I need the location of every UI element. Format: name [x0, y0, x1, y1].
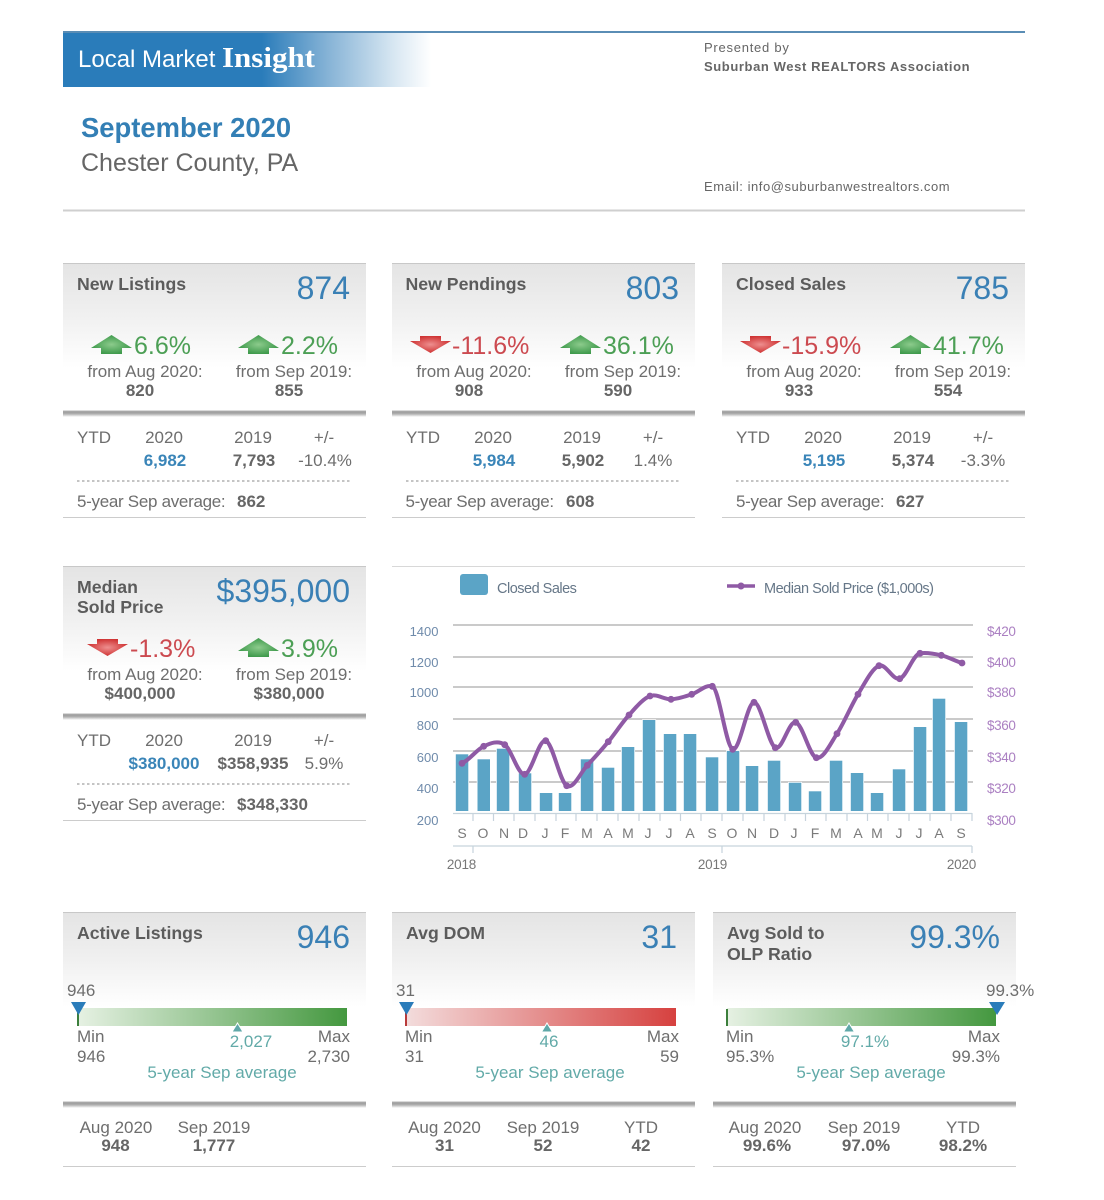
month labels: M	[581, 825, 593, 841]
panel: New Listings: from Aug 2020:	[87, 362, 203, 381]
panel: New Pendings: 803	[626, 270, 679, 306]
year labels: 2018	[447, 857, 476, 872]
panel: Closed Sales: 2020	[804, 428, 842, 447]
month labels: M	[830, 825, 842, 841]
panel: Active Listings	[63, 912, 366, 1167]
panel: Closed Sales: 5,374	[892, 451, 935, 470]
right axis labels: $420	[987, 624, 1015, 639]
panel: New Pendings: from Sep 2019:	[565, 362, 681, 381]
panel: Avg Sold to OLP Ratio: Avg Sold to	[727, 923, 825, 943]
month labels: A	[685, 825, 695, 841]
left axis labels	[410, 624, 438, 828]
panel: Closed Sales: Closed Sales	[736, 274, 846, 294]
panel: Avg DOM: 5-year Sep average	[475, 1063, 625, 1082]
panel: Active Listings: Max	[318, 1027, 350, 1046]
panel: Avg DOM: Avg DOM	[406, 923, 485, 943]
legend: median sold price: Median Sold Price ($1,000s)	[764, 581, 933, 597]
panel: Avg DOM: Max	[647, 1027, 679, 1046]
panel: Avg Sold to OLP Ratio: 98.2%	[939, 1136, 987, 1155]
month labels: J	[542, 825, 548, 841]
report title	[81, 112, 299, 177]
panel: Avg Sold to OLP Ratio: 99.3%	[909, 919, 1000, 955]
panel: Median Sold Price: 2020	[145, 731, 183, 750]
panel: Closed Sales: 785	[956, 270, 1009, 306]
panel: Avg DOM: 42	[632, 1136, 650, 1155]
panel: New Pendings: New Pendings	[406, 274, 527, 294]
panel: Avg DOM: 31	[435, 1136, 454, 1155]
panel: Avg DOM: 31	[641, 919, 677, 955]
panel: Avg Sold to OLP Ratio: 5-year Sep average	[796, 1063, 946, 1082]
month labels: N	[747, 825, 757, 841]
month labels: J	[916, 825, 922, 841]
header banner: Insight	[222, 43, 316, 74]
month labels: A	[934, 825, 944, 841]
panel: New Pendings	[392, 263, 695, 518]
left axis labels: 1200	[410, 655, 438, 670]
panel: Closed Sales: -15.9%	[782, 332, 861, 360]
panel: Avg DOM: Aug 2020	[408, 1118, 481, 1137]
panel: New Listings: YTD	[77, 428, 111, 447]
month labels: S	[956, 825, 966, 841]
panel: Median Sold Price: 2019	[234, 731, 272, 750]
presenter info	[704, 40, 970, 194]
right axis labels: $360	[987, 718, 1015, 733]
panel: Closed Sales: 933	[785, 381, 813, 400]
panel: Active Listings: 946	[67, 981, 95, 1000]
panel: New Listings: 6,982	[144, 451, 186, 470]
panel: Avg DOM: Sep 2019	[507, 1118, 579, 1137]
panel: Closed Sales: from Sep 2019:	[895, 362, 1011, 381]
panel: Avg Sold to OLP Ratio: YTD	[946, 1118, 980, 1137]
presenter info: Suburban West REALTORS Association	[704, 59, 970, 74]
median price line	[459, 650, 965, 789]
panel: Active Listings: 2,730	[307, 1047, 350, 1066]
panel: New Pendings: 5,984	[473, 451, 516, 470]
month labels: F	[811, 825, 819, 841]
panel: Active Listings: 2,027	[230, 1032, 272, 1051]
header banner	[63, 31, 1025, 87]
panel: Avg DOM	[392, 912, 695, 1167]
month labels: J	[790, 825, 798, 841]
panel: Median Sold Price: 3.9%	[281, 635, 338, 663]
year labels: 2019	[698, 857, 727, 872]
panel: Active Listings: 946	[77, 1047, 105, 1066]
right axis labels: $320	[987, 781, 1015, 796]
month labels: J	[896, 825, 902, 841]
panel: Avg DOM: 59	[660, 1047, 679, 1066]
panel: New Pendings: +/-	[643, 428, 663, 447]
panel: New Listings: 5-year Sep average:	[77, 492, 225, 511]
presenter info: Presented by	[704, 40, 790, 55]
panel: Closed Sales: YTD	[736, 428, 770, 447]
month labels: D	[518, 825, 528, 841]
panel: New Listings: 6.6%	[134, 332, 191, 360]
panel: Avg Sold to OLP Ratio: 97.1%	[841, 1032, 889, 1051]
panel: Median Sold Price: from Sep 2019:	[236, 665, 352, 684]
panel: New Pendings: 5,902	[562, 451, 604, 470]
panel: New Listings: 820	[126, 381, 154, 400]
month labels: A	[603, 825, 613, 841]
panel: Closed Sales: 5,195	[803, 451, 845, 470]
month labels: J	[644, 825, 652, 841]
right axis labels: $400	[987, 655, 1015, 670]
left axis labels: 800	[417, 718, 438, 733]
report title: Chester County, PA	[81, 149, 299, 177]
panel: New Listings: 2020	[145, 428, 183, 447]
year labels	[447, 857, 976, 872]
month labels: S	[457, 825, 467, 841]
panel: New Pendings: 36.1%	[603, 332, 674, 360]
panel: New Listings: 862	[237, 492, 265, 511]
panel: Closed Sales: 2019	[893, 428, 931, 447]
left axis labels: 1400	[410, 624, 438, 639]
panel: New Pendings: 5-year Sep average:	[406, 492, 554, 511]
panel: Closed Sales: 41.7%	[933, 332, 1004, 360]
panel: New Pendings: 908	[455, 381, 483, 400]
panel: Active Listings: Sep 2019	[178, 1118, 250, 1137]
panel: Closed Sales	[722, 263, 1025, 518]
right axis labels: $340	[987, 750, 1015, 765]
panel: Median Sold Price: $358,935	[218, 754, 288, 773]
panel: New Listings: New Listings	[77, 274, 186, 294]
panel: Active Listings: Active Listings	[77, 923, 203, 943]
panel: Median Sold Price: $380,000	[254, 684, 324, 703]
panel: Closed Sales: from Aug 2020:	[746, 362, 862, 381]
range bar	[71, 1002, 347, 1032]
panel: Closed Sales: -3.3%	[961, 451, 1005, 470]
month labels: A	[853, 825, 863, 841]
panel: Avg DOM: 31	[396, 981, 415, 1000]
panel: New Pendings: -11.6%	[452, 332, 529, 360]
panel: combo chart closed sales and median sold price	[392, 566, 1025, 872]
panel: Avg Sold to OLP Ratio: Aug 2020	[729, 1118, 801, 1137]
panel: Median Sold Price: $400,000	[105, 684, 175, 703]
header banner: Local Market	[78, 46, 216, 73]
panel: New Listings: -10.4%	[298, 451, 352, 470]
panel: Avg Sold to OLP Ratio: 95.3%	[726, 1047, 774, 1066]
closed sales bars	[456, 699, 967, 811]
left axis labels: 400	[417, 781, 438, 796]
month labels: O	[727, 825, 738, 841]
right axis labels: $300	[987, 813, 1015, 828]
month labels: O	[478, 825, 489, 841]
panel: Median Sold Price: +/-	[314, 731, 334, 750]
month labels: M	[871, 825, 883, 841]
panel: Closed Sales: 554	[934, 381, 963, 400]
panel: New Listings: 7,793	[233, 451, 275, 470]
panel: Closed Sales: +/-	[973, 428, 993, 447]
range bar	[726, 1002, 1005, 1032]
panel: Avg DOM: Min	[405, 1027, 432, 1046]
legend: closed sales: Closed Sales	[497, 581, 577, 597]
year labels: 2020	[947, 857, 976, 872]
panel: Median Sold Price	[63, 566, 366, 821]
panel: New Listings	[63, 263, 366, 518]
panel: New Pendings: 1.4%	[634, 451, 672, 470]
panel: New Listings: 874	[297, 270, 350, 306]
month labels: J	[666, 825, 672, 841]
panel: New Pendings: 2020	[474, 428, 512, 447]
panel: New Listings: 855	[275, 381, 303, 400]
panel: New Listings: 2019	[234, 428, 272, 447]
panel: Avg Sold to OLP Ratio: Max	[968, 1027, 1000, 1046]
panel: Median Sold Price: from Aug 2020:	[87, 665, 203, 684]
panel: New Listings: 2.2%	[281, 332, 338, 360]
panel: Avg Sold to OLP Ratio: 97.0%	[842, 1136, 890, 1155]
month labels: M	[622, 825, 634, 841]
panel: New Listings: from Sep 2019:	[236, 362, 352, 381]
month labels	[457, 825, 966, 841]
panel: Active Listings: 5-year Sep average	[147, 1063, 297, 1082]
panel: New Listings: +/-	[314, 428, 334, 447]
panel: New Pendings: 2019	[563, 428, 601, 447]
month labels: F	[561, 825, 569, 841]
panel: Active Listings: 948	[101, 1136, 130, 1155]
panel: Avg Sold to OLP Ratio: OLP Ratio	[727, 944, 812, 964]
month labels: N	[499, 825, 509, 841]
panel: Median Sold Price: Sold Price	[77, 597, 164, 617]
panel: Active Listings: Aug 2020	[80, 1118, 152, 1137]
panel: Median Sold Price: -1.3%	[130, 635, 195, 663]
panel: Active Listings: 1,777	[193, 1136, 235, 1155]
month labels: S	[707, 825, 717, 841]
panel: Median Sold Price: $348,330	[237, 795, 308, 814]
panel: Avg DOM: YTD	[624, 1118, 658, 1137]
right axis labels: $380	[987, 685, 1015, 700]
range bar	[399, 1002, 676, 1032]
panel: Median Sold Price: Median	[77, 577, 138, 597]
report title: September 2020	[81, 112, 291, 143]
legend: closed sales	[460, 574, 577, 597]
presenter info: Email: info@suburbanwestrealtors.com	[704, 179, 950, 194]
panel: Median Sold Price: $380,000	[129, 754, 199, 773]
panel: New Pendings: YTD	[406, 428, 440, 447]
panel: Median Sold Price: 5-year Sep average:	[77, 795, 225, 814]
panel: Avg Sold to OLP Ratio: 99.6%	[743, 1136, 791, 1155]
panel: Avg Sold to OLP Ratio: Sep 2019	[828, 1118, 900, 1137]
month labels: D	[769, 825, 779, 841]
panel: Closed Sales: 627	[896, 492, 924, 511]
panel: Avg Sold to OLP Ratio: Min	[726, 1027, 753, 1046]
panel: Closed Sales: 5-year Sep average:	[736, 492, 884, 511]
panel: New Pendings: 608	[566, 492, 594, 511]
panel: Median Sold Price: YTD	[77, 731, 111, 750]
panel: Median Sold Price: $395,000	[217, 573, 350, 609]
panel: Active Listings: 946	[297, 919, 350, 955]
panel: Median Sold Price: 5.9%	[305, 754, 343, 773]
panel: Active Listings: Min	[77, 1027, 104, 1046]
panel: Avg DOM: 52	[534, 1136, 552, 1155]
panel: Avg Sold to OLP Ratio	[713, 912, 1034, 1167]
panel: Avg Sold to OLP Ratio: 99.3%	[952, 1047, 1000, 1066]
panel: New Pendings: 590	[604, 381, 632, 400]
left axis labels: 1000	[410, 685, 438, 700]
left axis labels: 200	[417, 813, 438, 828]
right axis labels	[987, 624, 1015, 828]
panel: Avg DOM: 46	[540, 1032, 558, 1051]
panel: Avg Sold to OLP Ratio: 99.3%	[986, 981, 1034, 1000]
left axis labels: 600	[417, 750, 438, 765]
panel: Avg DOM: 31	[405, 1047, 424, 1066]
panel: New Pendings: from Aug 2020:	[416, 362, 532, 381]
